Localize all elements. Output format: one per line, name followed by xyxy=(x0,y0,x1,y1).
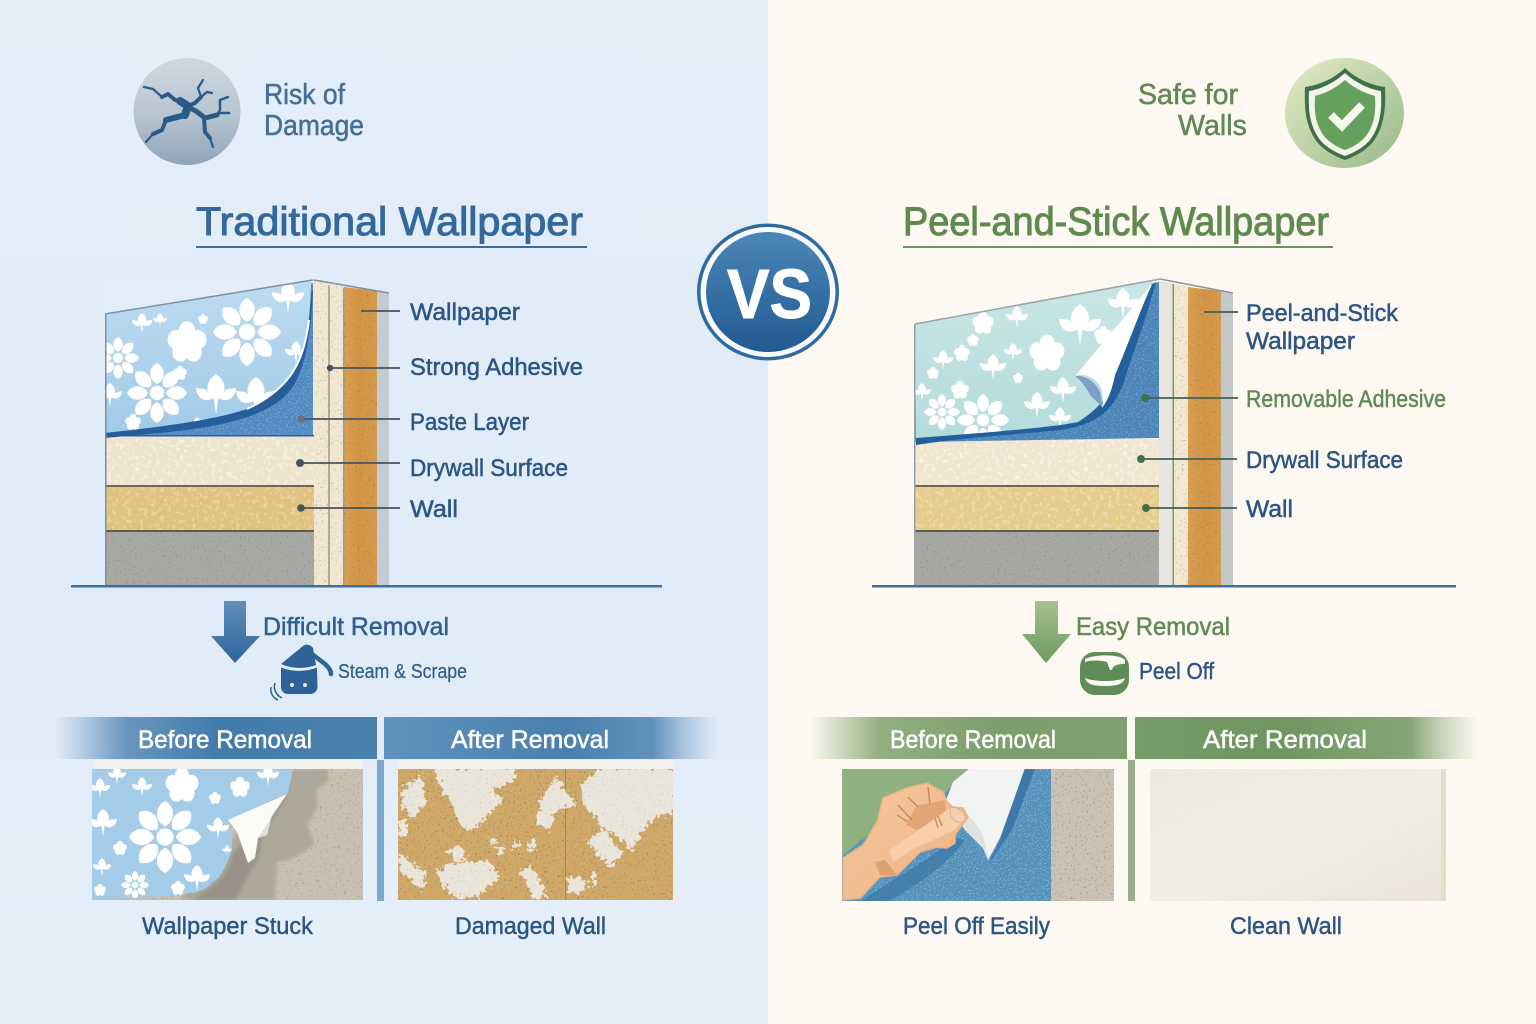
text: safe for walls xyxy=(1138,79,1247,142)
icon: shield check xyxy=(1285,58,1404,168)
layer: drywall cream xyxy=(105,437,314,487)
labels: Wallpaper xyxy=(1246,328,1355,355)
caption: clean wall: Clean Wall xyxy=(1230,913,1342,940)
caption: damaged wall: Damaged Wall xyxy=(455,913,606,940)
layer: peeling wallpaper xyxy=(913,279,1160,585)
layer: removable adhesive xyxy=(915,282,1159,445)
side: wall cross-section xyxy=(314,280,389,585)
header: after removal xyxy=(1135,717,1480,759)
labels: Paste Layer xyxy=(410,409,529,436)
labels: Removable Adhesive xyxy=(1246,386,1446,413)
caption: wallpaper stuck: Wallpaper Stuck xyxy=(142,913,314,940)
icon: cracked wall xyxy=(134,58,240,165)
icon: peel off roll xyxy=(1080,652,1129,695)
header: before removal xyxy=(55,717,377,759)
header: before removal xyxy=(810,717,1127,759)
layer: wall tan xyxy=(915,487,1159,532)
image: damaged wall xyxy=(398,760,675,900)
image: clean wall xyxy=(1150,769,1446,901)
header: before removal: Before Removal xyxy=(138,726,312,754)
image: wallpaper stuck xyxy=(89,760,363,900)
caption: peel off easily: Peel Off Easily xyxy=(903,913,1050,940)
heading: traditional wallpaper: Traditional Wallpaper xyxy=(196,200,583,244)
layer: concrete xyxy=(915,531,1159,585)
image: peel off easily xyxy=(842,768,1114,901)
panel: peel-and-stick wallpaper xyxy=(815,58,1474,940)
text: risk of damage xyxy=(264,79,364,142)
text: safe for walls: Safe for xyxy=(1138,79,1238,111)
labels xyxy=(1246,300,1446,523)
labels: Peel-and-Stick xyxy=(1246,300,1399,327)
leader lines xyxy=(1137,312,1238,512)
header: after removal: After Removal xyxy=(1203,726,1367,754)
diagram: traditional wall layers xyxy=(71,280,662,588)
layer: wall tan xyxy=(105,486,314,532)
text: steam and scrape: Steam & Scrape xyxy=(338,661,467,683)
labels: Wallpaper xyxy=(410,299,520,326)
text: peel off: Peel Off xyxy=(1139,658,1215,684)
header: after removal: After Removal xyxy=(451,726,609,754)
labels: Wall xyxy=(1246,496,1293,523)
layer: concrete xyxy=(105,531,314,585)
labels: Drywall Surface xyxy=(1246,447,1403,474)
arrow: difficult removal xyxy=(211,601,260,663)
diagram: peel-and-stick wall layers xyxy=(872,279,1456,588)
heading: peel-and-stick wallpaper: Peel-and-Stick Wallpaper xyxy=(903,200,1329,244)
text: safe for walls: Walls xyxy=(1178,110,1247,142)
layer: paste blue xyxy=(105,283,314,438)
labels xyxy=(410,299,583,523)
header: after removal xyxy=(384,717,720,759)
badge: vs xyxy=(697,224,839,360)
icon: steamer xyxy=(271,645,331,700)
side: wall cross-section xyxy=(1159,279,1233,585)
text: difficult removal: Difficult Removal xyxy=(263,613,449,641)
labels: Wall xyxy=(410,496,458,523)
panel: traditional wallpaper xyxy=(0,0,768,1024)
header: before removal: Before Removal xyxy=(890,726,1056,754)
text: easy removal: Easy Removal xyxy=(1076,613,1230,641)
leader lines xyxy=(296,311,400,512)
layer: drywall cream xyxy=(915,439,1159,487)
badge: vs: VS xyxy=(727,255,812,333)
text: risk of damage: Damage xyxy=(264,110,364,142)
arrow: easy removal xyxy=(1022,601,1071,663)
text: risk of damage: Risk of xyxy=(264,79,346,111)
labels: Drywall Surface xyxy=(410,455,568,482)
labels: Strong Adhesive xyxy=(410,354,583,381)
layer: floral wallpaper xyxy=(97,280,313,585)
